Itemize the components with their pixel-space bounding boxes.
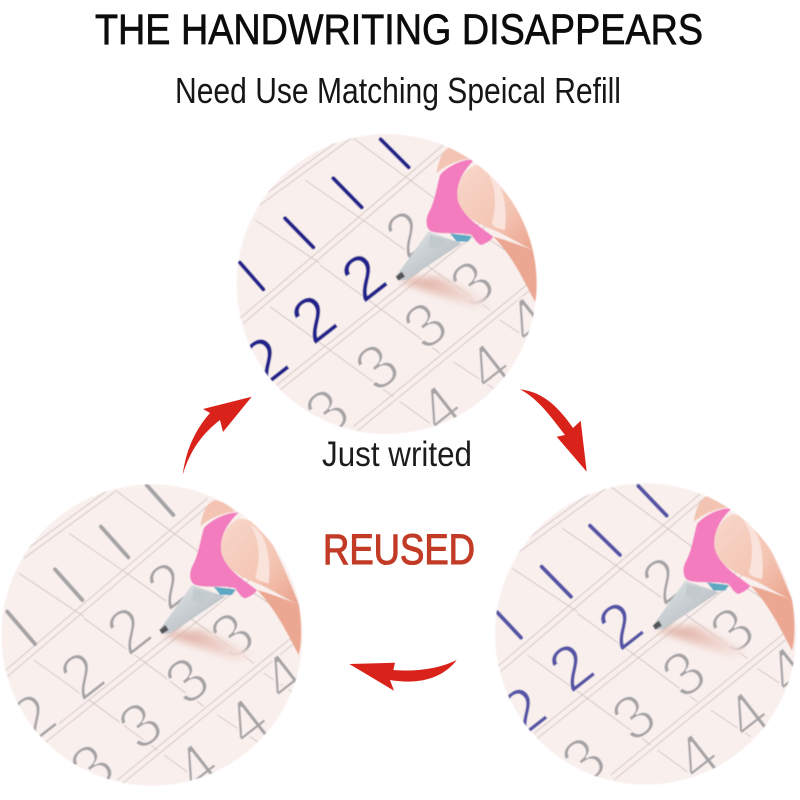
faded digits: 3: [152, 642, 223, 719]
grey template digits: 2: [372, 196, 443, 272]
grey template digits: [292, 196, 564, 451]
fading blue twos: 2: [585, 587, 656, 664]
paper background: [230, 130, 540, 440]
hand holding pen: [396, 147, 537, 308]
blue written ones: [240, 139, 409, 289]
arrow: right circle to left circle: [349, 660, 457, 691]
faded digits: 3: [105, 687, 176, 764]
blue written twos: [230, 239, 399, 399]
grey template digits: 3: [342, 329, 413, 406]
grey template digits: 4: [405, 371, 476, 447]
hand holding pen: [653, 496, 794, 657]
faded digits: 2: [0, 679, 69, 756]
faded digits: 2: [47, 637, 118, 714]
practice grid: [240, 133, 530, 432]
grey template digits: 3: [599, 679, 669, 756]
faded digits: 3: [197, 597, 268, 674]
faded digits: 2: [94, 592, 164, 669]
faded ones: [7, 485, 173, 644]
faded digits: 2: [134, 547, 204, 624]
arrow: left circle to top circle: [183, 397, 252, 475]
blue written twos: 2: [230, 322, 301, 399]
blue written twos: 2: [279, 281, 349, 357]
grey template digits: 4: [454, 329, 524, 406]
panel: bottom-right circle, fading: [489, 480, 800, 799]
paper background: [490, 480, 800, 790]
fading blue twos: 2: [489, 672, 559, 749]
faded digits: [0, 547, 319, 800]
grey template digits: 4: [662, 719, 733, 796]
blue written twos: 2: [329, 239, 399, 316]
panel: bottom-left circle, faded: [2, 484, 302, 786]
grey template digits: [549, 542, 800, 799]
grey template digits: 3: [697, 592, 768, 669]
fading blue twos: 2: [536, 629, 607, 706]
practice grid: [497, 482, 787, 780]
hand holding pen: [159, 500, 301, 662]
label: reused: REUSED: [323, 526, 475, 574]
grey template digits: 2: [629, 542, 699, 619]
faded digits: 4: [212, 684, 283, 761]
caption: just writed: Just writed: [322, 435, 472, 474]
faded digits: 4: [249, 639, 319, 716]
grey template digits: 3: [390, 287, 461, 364]
panel: top circle, just written: [236, 134, 538, 434]
fading blue ones: [497, 486, 667, 638]
fading blue twos: [489, 587, 656, 749]
grey template digits: 3: [437, 246, 508, 322]
paper background: [0, 480, 310, 790]
grey template digits: 3: [549, 722, 619, 799]
arrow: top circle to right circle: [520, 389, 587, 472]
title: THE HANDWRITING DISAPPEARS: [95, 6, 703, 54]
grey template digits: 3: [649, 636, 719, 712]
grey template digits: 4: [494, 282, 564, 359]
grey template digits: 4: [712, 677, 783, 754]
practice grid: [4, 487, 294, 785]
subtitle: Need Use Matching Speical Refill: [175, 70, 621, 111]
grey template digits: 3: [292, 374, 363, 451]
